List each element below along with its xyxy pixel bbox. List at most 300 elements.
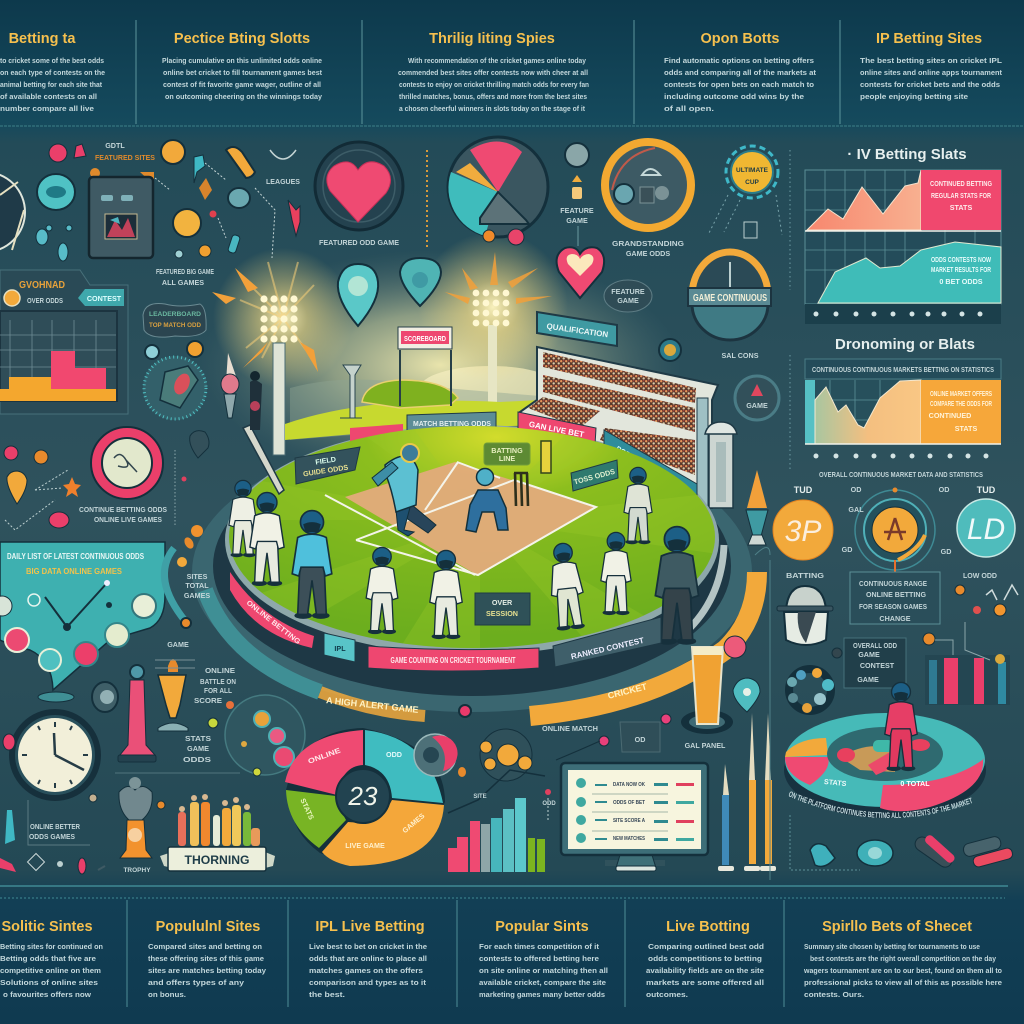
badge: yellow medal: ULTIMATE: [736, 167, 769, 174]
pie platform with figure: 0 TOTAL: [900, 779, 930, 788]
orange coin 3P: TUD: [794, 485, 813, 495]
column: Popululnl Sites: Popululnl Sites: [156, 919, 260, 935]
badge: yellow medal: [708, 146, 782, 238]
column: Opon Botts: [664, 31, 816, 113]
speech bubbles: FEATURE: [611, 287, 645, 296]
monitor with table: SITE SCORE A: [613, 818, 645, 824]
small labels above monitor: OD: [635, 735, 645, 744]
stumps: [514, 473, 528, 506]
pin teal right: [733, 678, 760, 712]
cricket helmet: [777, 571, 833, 645]
badge with coloured text: TOP MATCH ODD: [149, 322, 201, 329]
column: Popululnl Sites: and offers types of any: [148, 978, 245, 987]
speech bubbles: [604, 280, 652, 312]
light tower right: [418, 232, 568, 420]
dotted divider top centre: [426, 150, 428, 250]
outer stadium ring: teal and orange band: [192, 432, 757, 717]
teal panel with line chart: [0, 542, 165, 702]
pink blobs: [49, 144, 86, 162]
cricket helmet: BATTING: [786, 571, 824, 580]
left chart panel: [0, 270, 128, 414]
player: bat: [243, 425, 284, 494]
field sign centre: [484, 443, 530, 465]
cricket pitch: [325, 462, 596, 575]
icon: orange ring: GAME ODDS: [626, 249, 670, 258]
field sign centre: BATTING: [491, 446, 523, 455]
column: IPL Live Betting: matches games on the offers: [309, 966, 423, 975]
medallion: GD: [941, 547, 951, 556]
orange cup: FOR ALL: [204, 686, 233, 695]
player: fielder 2: [430, 550, 462, 639]
column: Spirllo Bets of Shecet: professional picks to view all of this as possible here: [804, 978, 1002, 987]
text box 1: CHANGE: [879, 614, 911, 623]
chart: Dronoming or Blats: OVERALL CONTINUOUS MARKET DATA AND STATISTICS: [819, 470, 983, 479]
column: Spirllo Bets of Shecet: Spirllo Bets of Shecet: [822, 919, 972, 935]
ring of beads: [787, 668, 834, 713]
beer glass: [681, 636, 746, 734]
red dot: [210, 210, 216, 218]
dot: [182, 476, 186, 482]
cup caption: LEAGUES: [266, 177, 300, 186]
orange dot: [199, 245, 211, 257]
column: Solitic Sintes: Betting sites for continued on: [0, 942, 103, 951]
column: Live Botting: availability fields are on the site: [646, 966, 764, 975]
column: Popular Sints: Popular Sints: [495, 919, 589, 935]
pin: teal 1: [338, 264, 378, 326]
column: Solitic Sintes: [0, 919, 103, 999]
front banner grey right: [553, 617, 661, 667]
chart: TV betting stats: ODDS CONTESTS NOW: [931, 255, 991, 264]
column: Betting ta: [0, 31, 105, 113]
field sign left: FIELD: [315, 454, 337, 467]
chart: Dronoming or Blats: Dronoming or Blats: [835, 336, 975, 353]
column: Popululnl Sites: Compared sites and betting on: [148, 942, 262, 951]
dial with orange arc: [688, 252, 771, 340]
small dots: [175, 250, 183, 258]
vertical guide line right: [755, 548, 770, 880]
column: IPL Live Betting: the best.: [309, 990, 345, 999]
star: [63, 477, 81, 497]
teal arc connector with dots: TOTAL: [185, 581, 209, 590]
pink obelisk: [118, 665, 156, 762]
column: Pectice Bting Slotts: on outcoming cheering on the winnings today: [165, 92, 323, 101]
cup label: [270, 150, 296, 159]
orange coin 3P: [773, 485, 833, 560]
player: fielder 1: [366, 547, 398, 634]
column: Spirllo Bets of Shecet: wagers tournament are on to our best, found on them all to: [803, 966, 1002, 975]
column: Popululnl Sites: [148, 919, 267, 999]
medallion: OD: [939, 485, 949, 494]
heart inner: [567, 254, 593, 276]
text box 1: [850, 572, 940, 624]
front banner teal small: [324, 633, 355, 662]
medallion: GD: [842, 545, 852, 554]
player: behind batsman: [229, 480, 257, 557]
text box 1: CONTINUOUS RANGE: [859, 579, 927, 588]
teal pill: [227, 234, 241, 254]
left chart panel: CONTEST: [87, 294, 122, 303]
teal coin: LD: [967, 513, 1005, 546]
pink figure: [288, 200, 300, 236]
player: batsman: [250, 492, 284, 586]
small circles: [145, 341, 203, 359]
donut chart: STATS: [298, 797, 316, 821]
orange cup: ONLINE: [205, 666, 235, 675]
top-left icons group: [36, 140, 300, 287]
column: Live Botting: odds competitions to betting: [648, 954, 762, 963]
stadium pillar right: [705, 422, 737, 508]
column: IP Betting Sites: IP Betting Sites: [876, 31, 982, 47]
swirl cluster: [208, 695, 305, 776]
column: Solitic Sintes: Solutions of online sites: [0, 978, 98, 987]
footer: [0, 886, 1008, 1007]
stadium stand with crowd: [520, 347, 718, 508]
teal coin: TUD: [977, 485, 996, 495]
column: Betting ta: Betting ta: [9, 31, 76, 47]
teal coin: [957, 485, 1015, 557]
scoreboard pink: [398, 327, 452, 406]
field sign right: TOSS ODDS: [573, 467, 616, 486]
labels: GDTL: [105, 141, 125, 150]
column: Pectice Bting Slotts: Pectice Bting Slotts: [174, 31, 310, 47]
medallion: OD: [851, 485, 861, 494]
field sign left: [295, 447, 360, 484]
column: Thrilig Iiting Spies: Thrilig Iiting Spies: [429, 31, 555, 47]
column: Solitic Sintes: Betting odds that five are: [0, 954, 96, 963]
chart: Dronoming or Blats: ONLINE MARKET OFFERS: [930, 389, 992, 398]
column: Pectice Bting Slotts: contest of fit favorite game wager, outline of all: [163, 80, 321, 89]
left chart panel: GVOHNAD: [19, 280, 65, 291]
field sign bottom: [475, 593, 530, 625]
dial with orange arc: GAME CONTINUOUS: [693, 293, 767, 304]
icon: small column with label: GAME: [566, 216, 588, 225]
small labels above monitor: ONLINE MATCH: [542, 724, 598, 733]
coins: [458, 729, 532, 781]
donut chart: GAMES: [400, 811, 427, 835]
column: Thrilig Iiting Spies: With recommendation of the cricket games online today: [408, 56, 587, 65]
column: IPL Live Betting: odds that are online to place all: [309, 954, 427, 963]
dotted network: [5, 470, 68, 530]
text box 1: FOR SEASON GAMES: [859, 602, 927, 611]
wicket yellow far: [541, 441, 551, 473]
orange pin: [7, 471, 27, 504]
spear flame right: [746, 470, 768, 545]
player: dark coach: [655, 527, 699, 645]
text box 2: GAME: [858, 650, 880, 659]
icon: teal blob: [37, 174, 75, 210]
column: Popular Sints: [479, 919, 608, 999]
bottom-left trophy: [115, 773, 240, 874]
teal figure: [194, 155, 205, 183]
pie chart: [448, 137, 548, 245]
column: IP Betting Sites: people enjoying betting site: [860, 92, 968, 101]
column: Solitic Sintes: competitive online on them: [0, 966, 101, 975]
icon: small column with label: [560, 143, 594, 246]
banner: Thorning: THORNING: [184, 853, 250, 867]
teal arc connector with dots: GAMES: [184, 591, 210, 600]
player: fielder 3: [601, 532, 631, 615]
orange cup: GAME: [187, 744, 209, 753]
cricket field: [229, 426, 715, 648]
column: Opon Botts: including outcome odd wins by the: [664, 92, 804, 101]
monitor with table: ODDS OF BET: [613, 800, 646, 806]
orange cup: ODDS: [183, 755, 211, 764]
column: Betting ta: of available contests on all: [0, 92, 97, 101]
column: IPL Live Betting: [309, 919, 427, 999]
teal arc connector with dots: SITES: [187, 572, 208, 581]
pink blob: [49, 512, 69, 528]
teal oval: [228, 188, 250, 208]
chart: TV betting stats: MARKET RESULTS FOR: [931, 265, 992, 274]
spear trophy: [221, 353, 239, 418]
vertical dotted guides right: [789, 150, 791, 470]
column: Popululnl Sites: sites are matches betting today: [148, 966, 267, 975]
column: Spirllo Bets of Shecet: Summary site chosen by betting for tournaments to use: [804, 942, 980, 951]
back banners: MATCH BETTING ODDS: [413, 419, 491, 428]
column: Opon Botts: contests for open bets on each match to: [664, 80, 814, 89]
text box 2: GAME: [857, 675, 879, 684]
column: IP Betting Sites: The best betting sites on cricket IPL: [860, 56, 1002, 65]
teal arc connector with dots: [164, 525, 210, 628]
chart: TV betting stats: [805, 146, 1001, 324]
column: Popular Sints: For each times competition of it: [479, 942, 599, 951]
column: IP Betting Sites: [860, 31, 1002, 101]
small labels right of stadium: [659, 339, 779, 420]
field sign bottom: OVER: [492, 598, 513, 607]
curved caption beneath platform: ON THE PLATFORM CONTINUES BETTING ALL CONTENTS OF THE MARKET: [788, 792, 972, 818]
pie platform with figure: STATS: [824, 777, 847, 788]
player: fielder bending: [546, 542, 587, 631]
mini chart right with legend: LOW ODD: [963, 571, 997, 580]
banner: Thorning: [160, 847, 275, 871]
badge: yellow medal: CUP: [745, 179, 760, 186]
column: Live Botting: outcomes.: [646, 990, 688, 999]
medallion: GAL: [848, 505, 864, 514]
tablet device: [89, 168, 154, 258]
column: Thrilig Iiting Spies: thrilled matches, bonus, offers and more from the best sites: [399, 92, 587, 101]
icon: small column with label: FEATURE: [560, 206, 594, 215]
small labels right of stadium: SAL CONS: [721, 351, 759, 360]
back banners: [350, 412, 697, 505]
medallion: [842, 485, 951, 572]
donut chart: ONLINE: [307, 746, 342, 766]
icon: orange ring: [605, 142, 691, 258]
column: Opon Botts: odds and comparing all of the markets at: [664, 68, 816, 77]
icon: orange ring: GRANDSTANDING: [612, 239, 684, 248]
back banners: POPULAR SITE BOARD: [614, 444, 688, 492]
clock dial pink: [91, 427, 163, 499]
column: IP Betting Sites: online sites and online apps tournament: [860, 68, 1002, 77]
icons mid-left: [4, 431, 209, 530]
icon: heart in circle: [315, 142, 403, 247]
donut chart: 23: [348, 781, 378, 811]
dark pin: [190, 431, 209, 458]
pie platform with figure: [784, 713, 986, 818]
orange star: [199, 178, 212, 200]
device in teal burst: [143, 356, 207, 420]
chart: Dronoming or Blats: [805, 336, 1001, 479]
badge with coloured text: [143, 303, 206, 337]
column: Pectice Bting Slotts: [162, 31, 323, 101]
outer stadium ring: teal and orange band: A HIGH ALERT GAME: [326, 695, 419, 715]
front banner pink left: ONLINE BETTING: [245, 598, 303, 646]
column: Live Botting: Comparing outlined best odd: [648, 942, 764, 951]
heart pin: [557, 247, 604, 298]
monitor with table: [561, 763, 708, 871]
donut chart: LIVE GAME: [345, 841, 385, 850]
column: Betting ta: animal betting for each site that: [0, 80, 102, 89]
pens: [718, 713, 776, 871]
monitor with table: DATA NOW OK: [613, 782, 645, 788]
field sign left: GUIDE ODDS: [302, 462, 349, 479]
pink figure on platform: [885, 682, 917, 771]
column: Pectice Bting Slotts: Placing cumulative on this unlimited odds online: [162, 56, 322, 65]
column: Live Botting: Live Botting: [666, 919, 750, 935]
column: Live Botting: [646, 919, 764, 999]
caption: CONTINUE BETTING ODDS: [79, 505, 167, 514]
field sign bottom: SESSION: [486, 609, 518, 618]
bar chart: [448, 770, 556, 872]
dotted vertical: [174, 450, 176, 525]
map pins and heart: [338, 247, 604, 326]
teal dots: [36, 225, 72, 261]
column: Betting ta: on each type of contests on the: [0, 68, 105, 77]
small labels above monitor: GAL PANEL: [685, 741, 726, 750]
small gray pin and pink oval: [3, 682, 118, 750]
bottom-left small icons: ONLINE BETTER: [30, 822, 81, 831]
crowd of figures: [178, 794, 260, 846]
orange ball 1: [161, 140, 185, 164]
chart: Dronoming or Blats: COMPARE THE ODDS FOR: [930, 399, 993, 408]
icon: heart in circle: FEATURED ODD GAME: [319, 238, 399, 247]
arc icon far left: [0, 172, 25, 252]
dark figure: [250, 371, 262, 430]
back banners: GAN LIVE BET: [528, 420, 585, 439]
chart: TV betting stats: STATS: [950, 203, 972, 212]
player: far fielder: [624, 467, 652, 544]
column: Solitic Sintes: o favourites offers now: [3, 990, 91, 999]
orange coin 3P: 3P: [785, 515, 821, 548]
clock: [9, 709, 101, 801]
light tower left: [212, 248, 353, 455]
chart: TV betting stats: CONTINUED BETTING: [930, 179, 992, 188]
front banner pink left: [230, 572, 314, 648]
column: Live Botting: markets are some offered all: [646, 978, 764, 987]
column: Popululnl Sites: these offering sites of this game: [148, 954, 264, 963]
bottom-left trophy: TROPHY: [123, 867, 151, 874]
column: Popular Sints: on site online or matching then all: [479, 966, 608, 975]
column: Opon Botts: Opon Botts: [701, 31, 779, 47]
curved caption beneath platform: [788, 792, 972, 870]
stand sign teal: QUALIFICATION: [546, 322, 609, 339]
player: umpire blue shirt: [292, 511, 332, 619]
text box 2: CONTEST: [860, 661, 895, 670]
bottom-left small icons: ODDS GAMES: [29, 832, 75, 841]
caption under tablet: FEATURED BIG GAME: [156, 267, 214, 276]
teal panel with line chart: BIG DATA ONLINE GAMES: [26, 567, 123, 576]
pin: teal 2: [400, 258, 441, 306]
column: Opon Botts: of all open.: [664, 104, 714, 113]
dotted connectors: [155, 163, 275, 258]
chart: TV betting stats: 0 BET ODDS: [939, 277, 983, 286]
teal panel with line chart: DAILY LIST OF LATEST CONTINUOUS ODDS: [7, 552, 145, 561]
mini chart right with legend: [923, 571, 1018, 705]
donut chart: ODD: [386, 750, 402, 759]
donut chart: [285, 728, 445, 866]
front banner grey right: RANKED CONTEST: [570, 636, 645, 661]
column: Popular Sints: contests to offered betting here: [479, 954, 599, 963]
player: bowler: [372, 444, 436, 536]
column: Solitic Sintes: Solitic Sintes: [1, 919, 93, 935]
small labels right of stadium: GAME: [746, 401, 768, 410]
orange cup: [155, 640, 236, 764]
column: Thrilig Iiting Spies: contests to enjoy on cricket thrilling match odds for every fan: [399, 80, 589, 89]
column: IPL Live Betting: comparison and types as to it: [309, 978, 427, 987]
left chart panel: OVER ODDS: [27, 296, 63, 305]
far field and hill: [285, 365, 540, 440]
gold pill: [226, 147, 255, 178]
field sign centre: LINE: [499, 454, 515, 463]
front banner pink centre: GAME COUNTING ON CRICKET TOURNAMENT: [390, 656, 516, 665]
stand sign teal: [537, 312, 617, 346]
speech bubbles: GAME: [617, 296, 639, 305]
monitor with table: NEW MATCHES: [613, 836, 645, 842]
orange cup: SCORE: [194, 696, 222, 705]
chart: TV betting stats: · IV Betting Slats: [847, 146, 967, 163]
player: wicket keeper: [466, 468, 508, 532]
column: Thrilig Iiting Spies: commended best sites offer contests now with cheer at all: [398, 68, 588, 77]
outer stadium ring: teal and orange band: CRICKET: [607, 681, 648, 701]
column: Opon Botts: Find automatic options on betting offers: [664, 56, 814, 65]
orange label: FEATURED SITES: [95, 153, 155, 162]
column: Spirllo Bets of Shecet: best contests are the right overall competition on the day: [810, 954, 997, 963]
sky glow behind stadium: [200, 250, 680, 480]
scoreboard pink: SCOREBOARD: [404, 336, 446, 343]
column: Spirllo Bets of Shecet: [803, 919, 1002, 999]
column: Thrilig Iiting Spies: a chosen cheerful winners in slots today on the stage of it: [399, 104, 585, 113]
field sign right: [571, 460, 618, 491]
orange ball 2: [173, 209, 201, 237]
column: Thrilig Iiting Spies: [398, 31, 589, 113]
text box 1: ONLINE BETTING: [866, 590, 926, 599]
column: IPL Live Betting: Live best to bet on cricket in the: [309, 942, 427, 951]
pills row: [810, 834, 1014, 870]
column: Spirllo Bets of Shecet: contests. Ours.: [804, 990, 864, 999]
text box 2: [832, 638, 906, 688]
header: five text columns: [0, 20, 1024, 126]
chart: Dronoming or Blats: CONTINUED: [929, 411, 971, 420]
orange cup: BATTLE ON: [200, 677, 236, 686]
chart: TV betting stats: REGULAR STATS FOR: [931, 191, 992, 200]
column: Popululnl Sites: on bonus.: [148, 990, 186, 999]
stadium rim: [213, 425, 731, 696]
front banner pink centre: [368, 646, 539, 671]
badge with coloured text: LEADERBOARD: [149, 311, 201, 318]
column: Pectice Bting Slotts: online bet cricket to fill tournament games best: [163, 68, 322, 77]
front banner teal small: IPL: [334, 644, 346, 653]
text box 2: OVERALL ODD: [853, 641, 897, 650]
column: IP Betting Sites: contests for cricket bets and the odds: [860, 80, 1000, 89]
column: IPL Live Betting: IPL Live Betting: [315, 919, 425, 935]
glass circle near donut: [414, 734, 458, 776]
orange cup: GAME: [167, 640, 189, 649]
bar chart: ODD: [542, 801, 556, 807]
orange cup: STATS: [185, 734, 211, 743]
icon: inner teal blob: [46, 186, 66, 198]
caption 2: ALL GAMES: [162, 278, 204, 287]
bottom-left small icons: [0, 794, 105, 874]
column: Popular Sints: marketing games many better odds: [479, 990, 605, 999]
